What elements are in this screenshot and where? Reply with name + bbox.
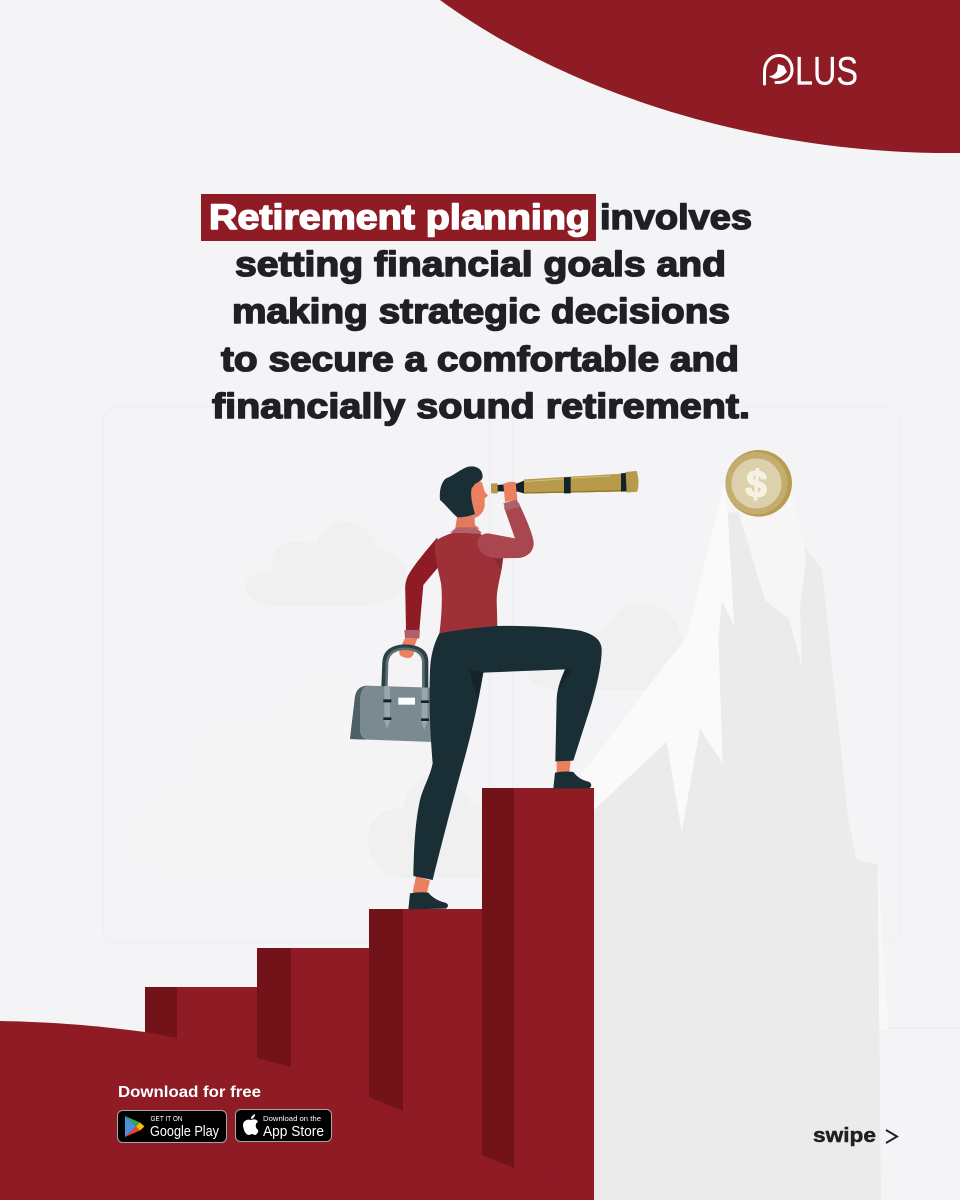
swipe prompt: swipe <box>813 1125 876 1147</box>
snow left <box>580 480 734 832</box>
play icon <box>125 1116 144 1137</box>
headline text: making strategic decisions <box>232 292 730 331</box>
headline text: involves <box>600 198 752 237</box>
step 1 <box>145 987 594 1200</box>
hair <box>440 466 483 517</box>
background clouds <box>138 522 700 878</box>
raised cuff <box>503 499 520 511</box>
mountain body <box>594 512 881 1200</box>
faint right slope <box>878 864 888 1030</box>
torso <box>435 533 503 634</box>
front shoe <box>553 771 591 788</box>
App Store badge: App Store <box>263 1124 324 1140</box>
raised arm <box>477 503 534 558</box>
Google Play badge <box>118 1110 226 1142</box>
far arm <box>405 537 439 631</box>
mountain <box>580 480 888 1200</box>
back shoe <box>408 892 448 909</box>
highlighted phrase: Retirement planning <box>209 198 590 237</box>
trousers <box>413 626 602 880</box>
step 3 <box>369 909 594 1200</box>
handbag <box>350 647 433 742</box>
collar <box>450 527 482 533</box>
ankles <box>413 760 571 894</box>
handbag and legs <box>350 626 602 909</box>
step 4 <box>482 788 594 1200</box>
bottom left red curve <box>0 1021 594 1200</box>
headline text: to secure a comfortable and <box>221 340 739 379</box>
headline text: setting financial goals and <box>235 245 726 284</box>
Google Play badge: GET IT ON <box>150 1116 182 1123</box>
App Store badge: Download on the <box>263 1116 321 1123</box>
headline text: financially sound retirement. <box>212 387 750 426</box>
neck and face <box>455 508 480 530</box>
red staircase <box>145 788 594 1200</box>
snow right <box>738 487 806 667</box>
logo: PLUS <box>764 50 858 94</box>
Google Play badge: Google Play <box>150 1124 220 1140</box>
top corner red curve <box>440 0 960 153</box>
download label: Download for free <box>118 1084 261 1101</box>
apple icon <box>243 1114 258 1135</box>
step 2 <box>257 948 594 1200</box>
upper body <box>405 466 639 634</box>
arrow <box>886 1130 897 1143</box>
raised hand <box>503 482 517 502</box>
highlight box <box>201 194 596 241</box>
lower hand and cuff <box>404 630 420 639</box>
swipe prompt <box>813 1125 897 1147</box>
logo: PLUS: LUS <box>795 50 858 94</box>
headline text <box>201 194 752 426</box>
App Store badge <box>236 1110 332 1142</box>
telescope <box>491 471 639 494</box>
person with telescope <box>350 466 639 909</box>
coin with dollar sign: $ <box>744 463 768 507</box>
coin with dollar sign <box>725 450 792 517</box>
